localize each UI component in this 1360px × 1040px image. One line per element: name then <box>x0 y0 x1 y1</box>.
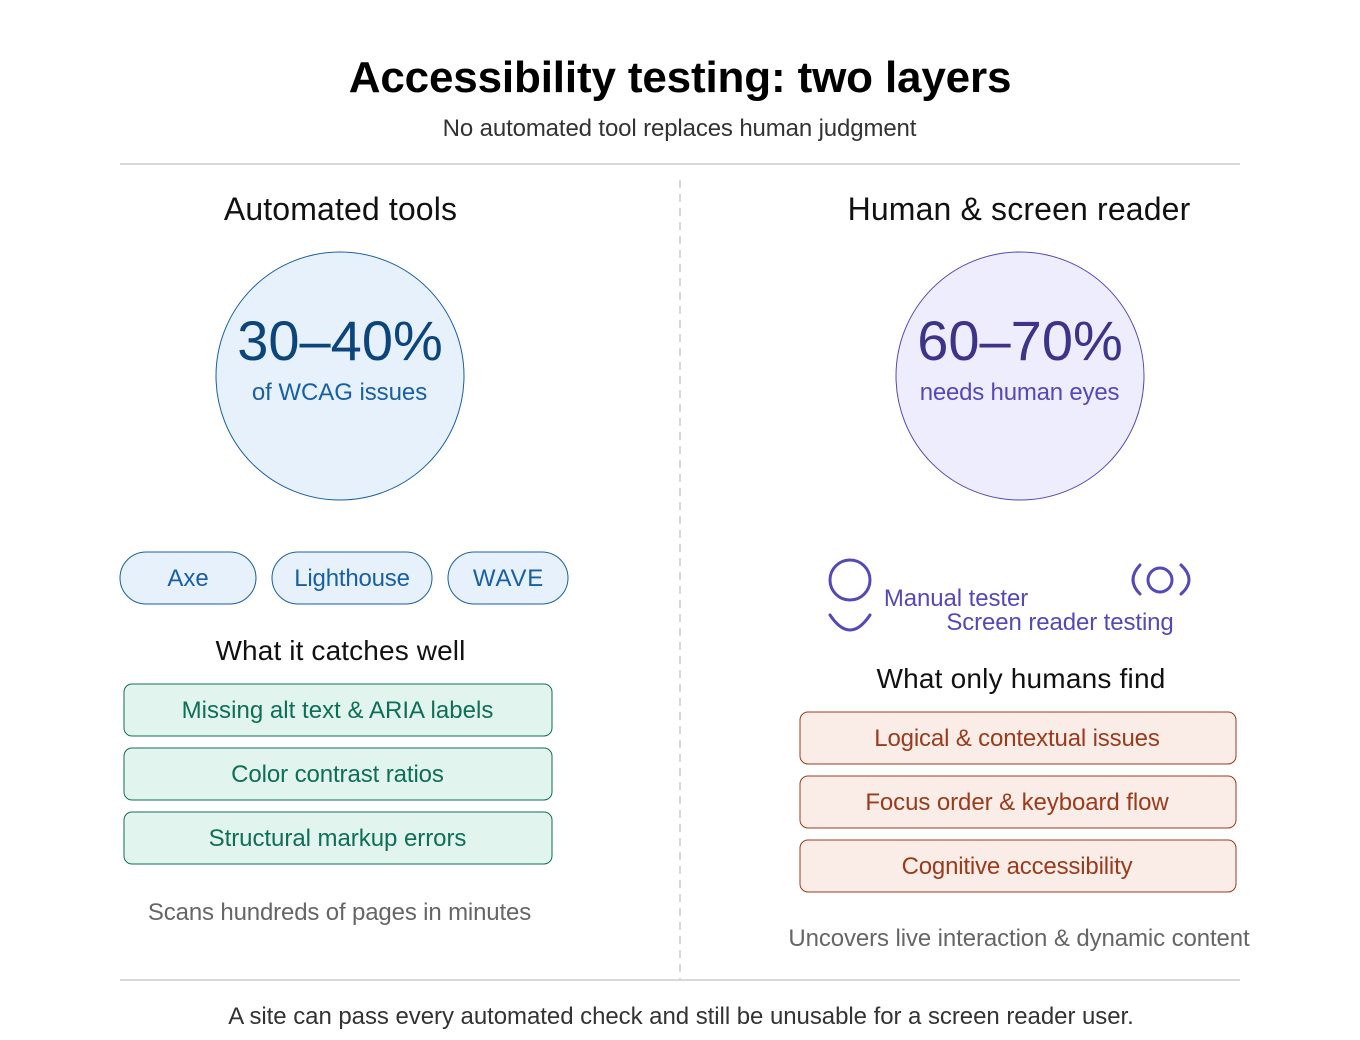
heading: automated tools: Automated tools <box>224 191 457 227</box>
tool pills: Axe <box>167 565 209 592</box>
stat circle: 30–40%: of WCAG issues <box>252 379 427 406</box>
subtitle: No automated tool replaces human judgment <box>443 115 916 142</box>
tool pills: Lighthouse <box>294 565 410 592</box>
list: catches: Missing alt text & ARIA labels <box>182 697 493 724</box>
list: human findings: Cognitive accessibility <box>902 853 1132 880</box>
heading: human and screen reader: Human & screen reader <box>848 191 1190 227</box>
note: automated: Scans hundreds of pages in minutes <box>148 899 531 926</box>
panel: human and screen reader <box>788 191 1250 952</box>
stat circle: 30–40%: 30–40% <box>237 309 443 372</box>
list: human findings: Logical & contextual issues <box>874 725 1160 752</box>
tool pills: WAVE <box>473 565 544 592</box>
icon: manual tester <box>828 558 872 632</box>
tool pills <box>120 552 568 604</box>
panel: automated tools <box>120 191 568 926</box>
stat circle: 60–70%: 60–70% <box>917 309 1123 372</box>
stat circle: 60–70% <box>896 252 1144 500</box>
note: human: Uncovers live interaction & dynamic content <box>788 925 1250 952</box>
heading: what only humans find: What only humans find <box>876 663 1166 694</box>
footer message: A site can pass every automated check and still be unusable for a screen reader user. <box>228 1003 1134 1030</box>
stat circle: 30–40% <box>216 252 464 500</box>
title: Accessibility testing: two layers <box>349 53 1011 102</box>
icon: screen reader <box>1131 563 1190 596</box>
heading: what it catches well: What it catches well <box>215 635 466 666</box>
label: screen reader testing: Screen reader testing <box>946 609 1174 636</box>
list: human findings <box>800 712 1236 892</box>
list: catches <box>124 684 552 864</box>
list: catches: Color contrast ratios <box>231 761 444 788</box>
list: human findings: Focus order & keyboard flow <box>865 789 1169 816</box>
label: manual tester: Manual tester <box>884 585 1028 612</box>
stat circle: 60–70%: needs human eyes <box>920 379 1119 406</box>
list: catches: Structural markup errors <box>209 825 466 852</box>
